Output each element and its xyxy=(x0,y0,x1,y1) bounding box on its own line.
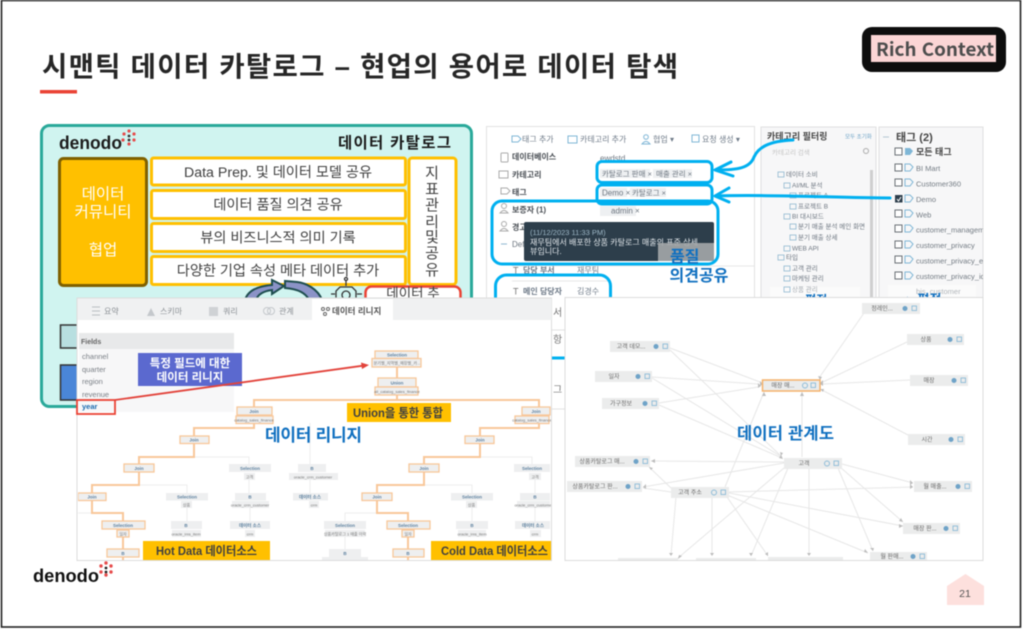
grey nodes: Selection xyxy=(462,494,482,500)
panel: catalog view details xyxy=(486,126,754,409)
badge: Rich Context: Rich Context xyxy=(876,36,994,62)
logo: denodo bottom: denodo xyxy=(33,565,99,586)
highlighted nodes: 분기별_지역별_매장별_카... xyxy=(374,360,420,366)
chips: tag xyxy=(600,188,666,198)
fields table: revenue xyxy=(82,390,109,399)
catalog heading: 데이터 카탈로그 xyxy=(338,134,451,152)
row: metadata: 다양한 기업 속성 메타 데이터 추가 xyxy=(177,264,379,280)
page number: 21 xyxy=(959,588,971,600)
icon: robot xyxy=(331,278,362,300)
orange connectors xyxy=(92,367,539,560)
metadata rows: 김경수 xyxy=(577,286,599,296)
tooltip: 재무팀에서 배포한 상품 카탈로그 매출의 표준 상세 xyxy=(530,237,698,247)
tab bar: 데이터 리니지 xyxy=(332,306,381,316)
callout: category highlight xyxy=(597,162,712,182)
nodes: 고객 데모... xyxy=(617,342,646,350)
highlight: year field xyxy=(77,400,115,414)
highlighted nodes: catalog_sales_finance xyxy=(234,418,275,422)
nodes: 정레인... xyxy=(871,304,893,312)
box: metric management: 공 xyxy=(425,245,439,262)
grey nodes: 상품 xyxy=(183,502,190,508)
label: quality opinions: 의견공유 xyxy=(670,267,729,285)
highlighted nodes: Join xyxy=(475,438,485,442)
nodes: 고객 주소 xyxy=(678,490,702,496)
category tree xyxy=(770,170,865,298)
chips: category xyxy=(600,168,692,178)
metadata rows: 담당 부서 xyxy=(523,265,555,275)
label: cold data xyxy=(431,541,551,560)
chips: tag: Demo × xyxy=(602,188,631,198)
highlighted nodes: Join xyxy=(189,438,199,442)
metadata rows: 데이터베이스 xyxy=(512,152,557,162)
metadata rows: 재무팀 xyxy=(577,265,599,275)
grey nodes: 고객 xyxy=(246,474,253,480)
panel: tags: BI Mart xyxy=(916,164,941,173)
toolbar: 요청 생성 ▾ xyxy=(702,134,740,144)
category tree: 데이터 소비 xyxy=(786,170,818,178)
highlighted nodes: Join xyxy=(419,466,429,471)
chip: admin: admin × xyxy=(611,206,640,216)
grey nodes: B xyxy=(248,494,252,500)
category tree: 프로젝트 A xyxy=(798,190,829,200)
category tree: AI/ML 분석 xyxy=(792,180,823,190)
callout: owner highlight xyxy=(492,201,718,264)
highlighted nodes: all_catalog_sales_finance xyxy=(374,389,421,394)
grey nodes: oracle_crm_custome xyxy=(514,502,552,508)
box: data community collaboration: 커뮤니티 xyxy=(74,203,132,221)
chips: category: 카탈로그 판매 × xyxy=(602,170,652,178)
tab bar: 쿼리 xyxy=(223,306,238,316)
panel: tags: 태그 (2) xyxy=(896,130,933,144)
grey nodes: 상품 xyxy=(468,502,475,508)
nodes xyxy=(567,303,972,563)
grey nodes: 고객 xyxy=(531,474,539,480)
highlighted nodes: 일자 xyxy=(119,530,127,536)
panel: data lineage xyxy=(77,298,553,561)
badge: Rich Context xyxy=(862,27,1006,72)
box: data community collaboration: 데이터 xyxy=(82,185,124,203)
grey nodes: oracle_ims_item xyxy=(457,532,487,536)
fields table: region xyxy=(82,377,103,386)
metadata rows: T xyxy=(513,266,519,276)
metadata rows xyxy=(499,152,754,296)
box: metric management: 관 xyxy=(425,197,439,214)
grey nodes: 데이터 소스 xyxy=(299,494,321,500)
grey nodes: 상품카탈로그 1 매출 이력 xyxy=(324,530,366,536)
row: quality opinions xyxy=(152,190,406,218)
panel: catalog view details: 그 xyxy=(553,385,562,396)
tab bar: 요약 xyxy=(104,306,119,316)
panel: tags: Customer360 xyxy=(916,180,961,188)
nodes: 매장 매... xyxy=(771,382,795,390)
label: union: Union을 통한 통합 xyxy=(353,405,443,420)
highlighted nodes: Join xyxy=(134,466,144,471)
category tree: 상품 관리 xyxy=(792,284,818,294)
logo: denodo top: denodo xyxy=(59,133,122,153)
category tree: WEB API xyxy=(792,246,819,252)
nodes: 상품카탈로그 매... xyxy=(579,458,625,466)
row: business meaning: 뷰의 비즈니스적 의미 기록 xyxy=(200,230,356,246)
panel: catalog view details: 항 xyxy=(553,334,562,346)
lineage tree xyxy=(78,351,553,561)
highlighted nodes: Selection xyxy=(387,352,407,358)
highlighted nodes: Union xyxy=(391,380,404,386)
highlighted nodes: catalog_sales_finance xyxy=(512,418,553,422)
grey nodes: 데이터 소스 xyxy=(522,522,544,529)
panel: tags: Web xyxy=(916,210,931,220)
grey nodes: B xyxy=(184,523,188,528)
category tree: BI 대시보드 xyxy=(792,212,824,220)
box: metric management: 유 xyxy=(425,262,439,279)
grey nodes: Selection xyxy=(177,494,197,500)
highlighted nodes: Join xyxy=(87,494,97,500)
grey nodes: B xyxy=(343,551,347,556)
label: union xyxy=(347,403,451,422)
box: metric management: 표 xyxy=(425,181,439,198)
box: data add: 데이터 추 xyxy=(386,286,440,301)
panel: category filter: 카테고리 필터링 xyxy=(767,130,827,142)
metadata rows: 보증자 (1) xyxy=(512,206,546,214)
nodes: 일자 xyxy=(608,372,620,380)
tab bar: 관계 xyxy=(279,306,294,316)
panel: tags: 모든 태그 xyxy=(916,146,952,157)
highlighted nodes: Join xyxy=(372,494,382,500)
callout: main owner highlight xyxy=(496,275,610,358)
highlighted nodes xyxy=(78,351,553,557)
toolbar: 협업 ▾ xyxy=(653,134,674,144)
arrows: cycle xyxy=(245,280,322,300)
clipped tag names: customer_management xyxy=(916,226,996,234)
nodes: 상품카탈로그 판... xyxy=(572,482,618,490)
metadata rows: ewdstd xyxy=(600,154,625,163)
category tree: 타입 xyxy=(786,252,798,262)
label: cold data: Cold Data 데이터소스 xyxy=(441,544,548,558)
row: business meaning xyxy=(152,224,406,252)
box: metric management: 리 xyxy=(425,214,439,231)
clipped tag names xyxy=(916,227,984,282)
arrowheads xyxy=(643,376,913,559)
overlay patch xyxy=(658,243,714,261)
fields table: channel xyxy=(82,352,109,361)
panel: data catalog xyxy=(42,126,472,406)
label: rating sliver: ▲ 평점 xyxy=(790,293,827,307)
label: field lineage: 특정 필드에 대한 xyxy=(150,356,231,370)
panel: tags xyxy=(878,126,984,298)
panel: category filter xyxy=(761,127,876,307)
toolbar: 카테고리 추가 xyxy=(580,135,627,144)
grey nodes: oracle_crm_customer xyxy=(231,502,270,508)
fields table: year xyxy=(82,402,98,411)
callout: tag highlight xyxy=(597,185,712,204)
edges xyxy=(643,313,913,558)
arrow: year to selection xyxy=(115,362,369,400)
title: 시맨틱 데이터 카탈로그 – 현업의 용어로 데이터 탐색 xyxy=(42,51,678,82)
metadata rows: T xyxy=(513,286,519,296)
tooltip: (11/12/2023 11:33 PM) xyxy=(530,228,606,237)
tab bar xyxy=(78,298,552,321)
grey nodes: B xyxy=(310,466,314,471)
panel: catalog view details: 서 xyxy=(553,307,562,319)
fields table xyxy=(79,333,234,412)
grey nodes: Selection xyxy=(522,466,542,471)
tooltip: 뷰입니다. xyxy=(530,246,562,256)
category tree: 분기 매출 상세 xyxy=(798,232,838,242)
partial box: hidden upper xyxy=(60,325,90,348)
panel: category filter: 모두 초기화 xyxy=(845,132,872,140)
grey connectors xyxy=(78,423,535,549)
clipped tag names: customer_privacy_employee xyxy=(916,256,1011,266)
nodes: 매장 판... xyxy=(913,524,937,532)
label: data lineage: 데이터 리니지 xyxy=(265,426,362,445)
partial box: hidden lower xyxy=(60,365,90,400)
box: data community collaboration: 협업 xyxy=(89,241,117,259)
metadata rows: 메인 담당자 xyxy=(523,286,563,296)
row: quality opinions: 데이터 품질 의견 공유 xyxy=(213,198,343,214)
grey nodes: 데이터 소스 xyxy=(239,522,261,529)
highlighted nodes: Selection xyxy=(398,523,418,528)
box: data community collaboration xyxy=(60,158,146,286)
grey nodes: oracle_crm_customer xyxy=(294,474,333,480)
box: data add xyxy=(366,286,460,316)
panel: tags: bis_customer xyxy=(916,287,961,296)
chip: admin xyxy=(600,206,640,216)
grey nodes: crm xyxy=(311,502,318,508)
tab bar: 스키마 xyxy=(160,307,183,316)
nodes: 월 매출... xyxy=(923,482,947,490)
box: metric management xyxy=(409,158,456,284)
label: field lineage: 데이터 리니지 xyxy=(157,370,223,384)
title underline xyxy=(40,90,77,94)
label: field lineage xyxy=(138,353,242,386)
metadata rows: Def xyxy=(512,240,525,249)
toolbar xyxy=(512,134,740,144)
panel: data relationship diagram xyxy=(565,298,983,563)
label: hot data: Hot Data 데이터소스 xyxy=(156,544,257,558)
grey nodes: crm xyxy=(247,532,254,536)
clipped tag names: customer_privacy_identity xyxy=(916,272,1003,281)
label: rating: ▲ 평점 xyxy=(901,292,941,307)
highlighted nodes: Selection xyxy=(113,523,133,528)
tooltip xyxy=(524,222,714,261)
box: metric management: 및 xyxy=(425,229,439,246)
metadata rows: 카테고리 xyxy=(512,170,541,180)
row: data prep: Data Prep. 및 데이터 모델 공유 xyxy=(184,165,372,181)
panel: category filter: 카테고리 검색 xyxy=(772,148,810,156)
grey nodes: Selection xyxy=(335,523,355,528)
nodes: 가구정보 xyxy=(610,400,633,408)
nodes: 고객 xyxy=(798,460,810,468)
label: quality opinions: 품질 xyxy=(670,248,699,266)
category tree: 프로젝트 B xyxy=(798,202,828,210)
arrow: tag filter to tag xyxy=(715,188,890,202)
row: metadata xyxy=(152,256,406,284)
category tree: 고객 관리 xyxy=(792,264,818,272)
nodes: 매장 xyxy=(923,376,935,384)
page number xyxy=(947,574,984,605)
nodes: 월 판매... xyxy=(880,552,904,560)
grey nodes: B xyxy=(533,494,537,500)
label: relationship diagram: 데이터 관계도 xyxy=(737,424,834,443)
box: metric management: 지 xyxy=(425,165,439,182)
highlighted nodes: Join xyxy=(249,409,259,414)
nodes: 시간 xyxy=(921,436,933,444)
grey nodes: oracle_ims_item xyxy=(171,532,201,536)
label: quality opinions xyxy=(670,248,729,285)
grey nodes: Selection xyxy=(240,466,260,471)
toolbar: 태그 추가 xyxy=(522,135,554,144)
arrow: category filter to category xyxy=(715,140,793,176)
fields table: Fields xyxy=(81,339,101,346)
highlighted nodes: B xyxy=(121,551,125,556)
label: hot data xyxy=(143,541,270,560)
category tree: 마케팅 관리 xyxy=(792,274,824,282)
fields table: quarter xyxy=(82,365,106,374)
panel: tags: Demo xyxy=(916,195,936,204)
grey nodes: B xyxy=(470,523,474,528)
panel: tags: customer_privacy xyxy=(916,241,975,250)
highlighted nodes: 일자 xyxy=(404,530,412,536)
metadata rows: 경고 xyxy=(512,222,527,232)
highlighted nodes: Join xyxy=(531,409,541,414)
row: data prep xyxy=(152,158,406,185)
metadata rows: 태그 xyxy=(512,187,527,197)
grey nodes xyxy=(166,464,552,561)
category tree: 분기 매출 분석 메인 화면 xyxy=(798,222,865,230)
chips: category: 매출 관리 × xyxy=(656,168,692,178)
grey nodes: crm xyxy=(532,532,539,536)
chips: tag: 카탈로그 × xyxy=(632,188,666,198)
nodes: 상품 xyxy=(920,336,932,344)
highlighted nodes: B xyxy=(406,551,410,556)
